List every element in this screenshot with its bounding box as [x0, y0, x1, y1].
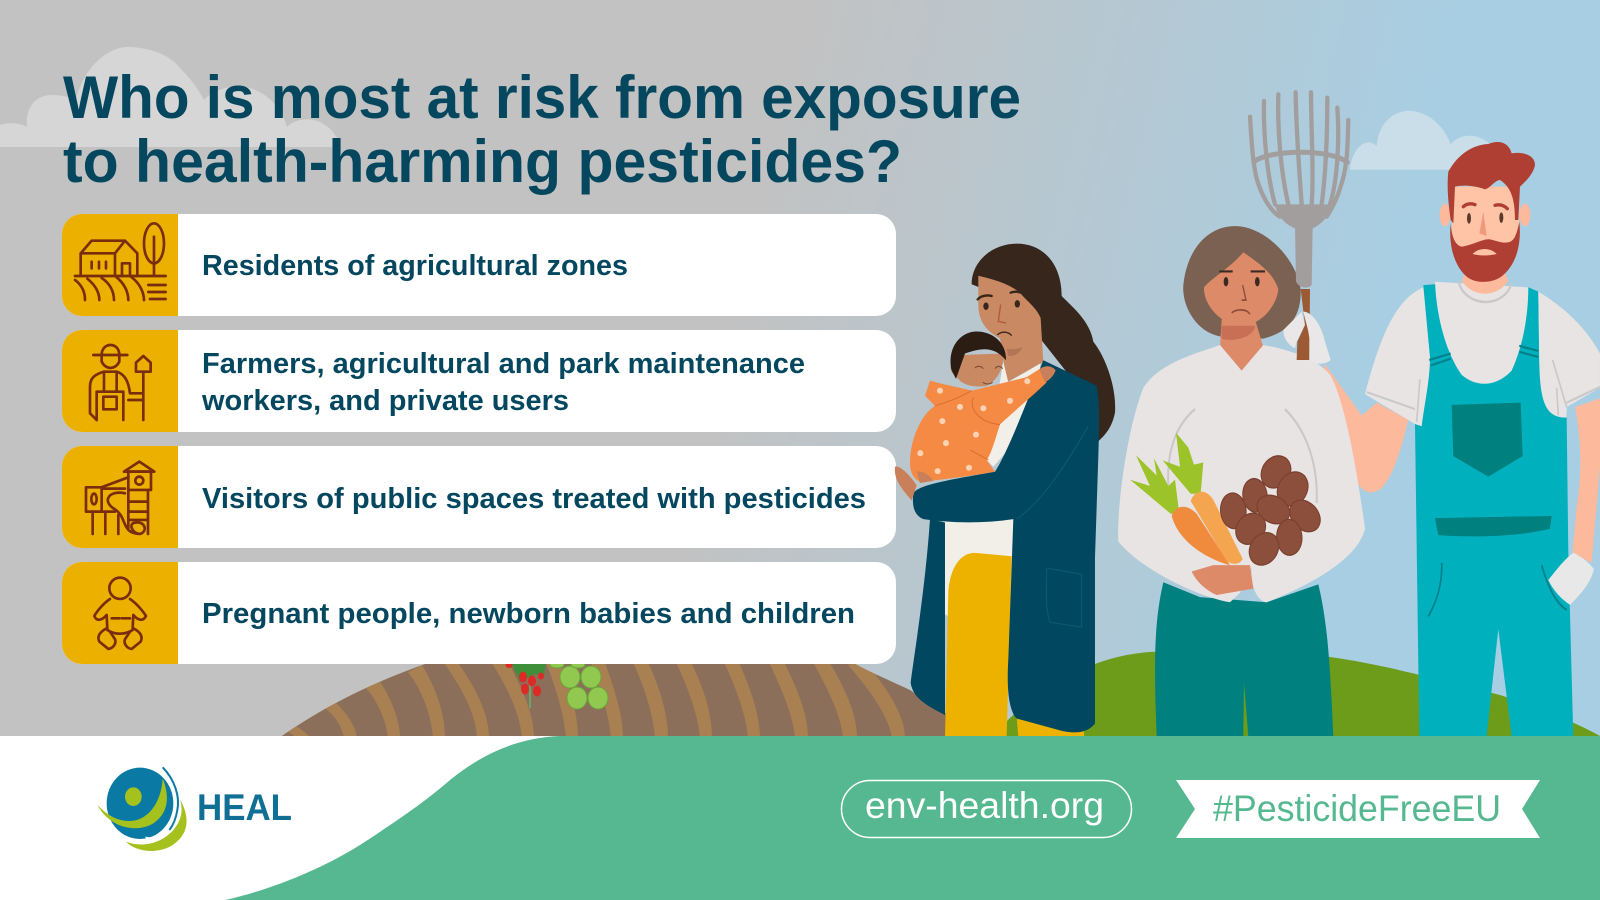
card: farmers	[62, 330, 896, 432]
baby hand	[1039, 366, 1056, 382]
trousers	[1155, 582, 1333, 736]
character: farmer man	[1322, 272, 1600, 736]
mother hand	[895, 467, 917, 501]
overalls	[1415, 284, 1573, 736]
long hair	[972, 244, 1115, 441]
t-shirt	[1365, 287, 1430, 426]
icon: baby	[94, 578, 146, 649]
logo: HEAL	[97, 767, 292, 851]
glove on rake: thumb	[1303, 312, 1331, 364]
carrot leaves	[1130, 455, 1179, 514]
beard	[1450, 222, 1520, 282]
card: pregnant people: Pregnant people, newborn babies and children	[202, 598, 855, 630]
face	[1452, 187, 1519, 283]
card: visitors: Visitors of public spaces treated with pesticides	[202, 483, 866, 515]
character: mother and baby	[895, 244, 1115, 737]
icon: farmhouse	[75, 223, 166, 300]
hair	[1183, 226, 1301, 339]
logo: HEAL: HEAL	[197, 787, 292, 828]
cloud: left	[0, 47, 340, 147]
belt	[1435, 516, 1552, 536]
neck	[1462, 272, 1508, 294]
card: pregnant people	[62, 562, 896, 664]
hashtag ribbon	[1176, 780, 1540, 838]
character: woman with vegetables	[1118, 226, 1365, 736]
rake	[1250, 92, 1348, 364]
cloud: right	[1350, 111, 1493, 170]
white shirt lower	[938, 519, 1015, 615]
card: farmers: Farmers, agricultural and park maintenance	[202, 348, 805, 380]
rake wooden handle	[1297, 289, 1310, 360]
baby head	[955, 354, 1003, 387]
tomato plant	[506, 662, 546, 708]
title	[63, 64, 1021, 195]
footer white band	[0, 736, 1600, 900]
hand	[1192, 565, 1253, 595]
footer green wave	[225, 736, 1600, 900]
white shirt upper	[987, 362, 1043, 467]
icon: farmer with shovel	[90, 345, 151, 420]
hashtag ribbon: #PesticideFreeEU	[1213, 788, 1501, 829]
cabbages	[550, 662, 608, 709]
baby body	[910, 369, 1047, 482]
carrots	[1172, 507, 1230, 565]
website pill: env-health.org	[865, 785, 1104, 826]
yellow trousers	[945, 553, 1084, 737]
icon: playground	[86, 462, 154, 534]
hair	[1448, 142, 1535, 223]
card: residents: Residents of agricultural zones	[202, 250, 628, 282]
potatoes	[1217, 450, 1324, 571]
face	[1204, 252, 1278, 326]
arms	[1322, 364, 1408, 492]
coat	[911, 519, 945, 715]
baby polka dots	[917, 378, 1030, 474]
website pill	[842, 780, 1132, 838]
glove: right hand	[1548, 553, 1594, 605]
eyes and brows	[1467, 213, 1471, 224]
title: Who is most at risk from exposure	[63, 64, 1021, 131]
ears	[1440, 204, 1450, 226]
neck	[1220, 319, 1263, 375]
blouse	[1118, 345, 1365, 602]
man head	[1440, 142, 1535, 283]
mother neck and face	[978, 276, 1043, 382]
card: farmers: workers, and private users	[201, 385, 569, 417]
title: to health-harming pesticides?	[63, 128, 902, 195]
list panel	[62, 214, 896, 664]
pocket	[1452, 403, 1523, 477]
card: visitors	[62, 446, 896, 548]
green hill	[990, 650, 1600, 740]
ploughed field	[282, 664, 946, 736]
glove on rake: back fingers	[1283, 312, 1305, 348]
card: residents	[62, 214, 896, 316]
